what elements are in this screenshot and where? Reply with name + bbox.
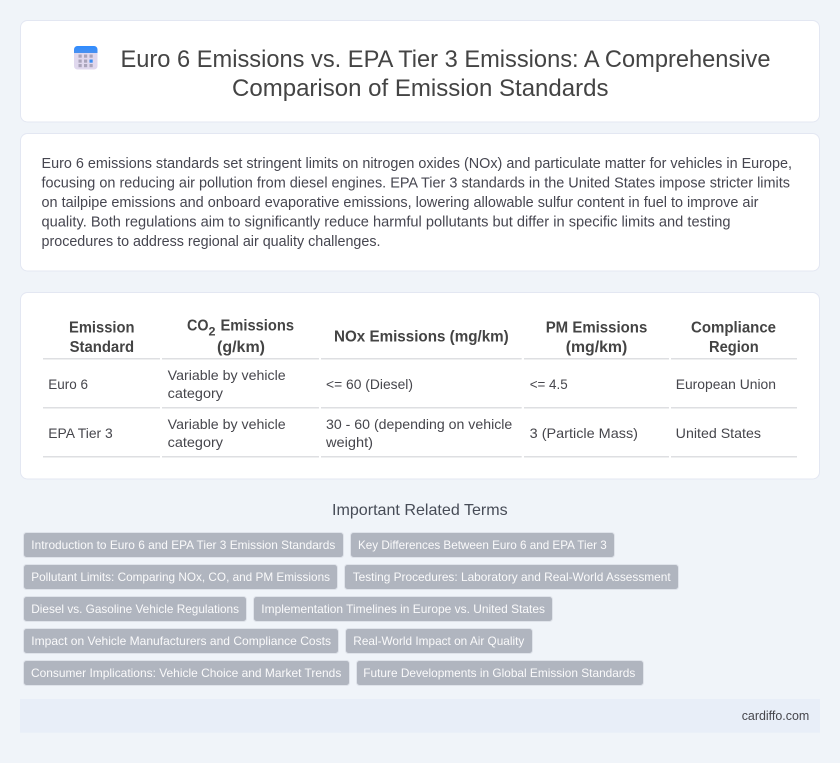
footer xyxy=(20,699,820,733)
intro text: focusing on reducing air pollution from diesel engines. EPA Tier 3 standards in the United States impose stricter limits xyxy=(42,176,790,192)
table row: Euro 6: European Union xyxy=(676,376,776,392)
header: emission standard xyxy=(69,320,134,356)
heading: important related terms: Important Related Terms xyxy=(332,502,508,519)
intro text: on tailpipe emissions and onboard evaporative emissions, lowering allowable sulfur content in fuel to improve air xyxy=(42,195,759,211)
tag: Testing Procedures: Laboratory and Real-World Assessment xyxy=(353,570,671,584)
panel: comparison table xyxy=(20,292,820,479)
header: compliance region: Compliance xyxy=(691,320,776,337)
header: CO2 emissions: Emissions xyxy=(220,318,294,335)
tag: Real-World Impact on Air Quality xyxy=(353,634,524,648)
table row: EPA Tier 3: United States xyxy=(676,425,761,441)
panel: introduction xyxy=(20,134,820,271)
table row: Euro 6 xyxy=(48,367,776,401)
table row: EPA Tier 3: Variable by vehicle xyxy=(168,416,286,432)
tag xyxy=(344,564,678,590)
table row: Euro 6: Variable by vehicle xyxy=(168,367,286,383)
header: emission standard: Standard xyxy=(70,339,134,356)
header: compliance region: Region xyxy=(709,339,759,356)
table row: EPA Tier 3: 3 (Particle Mass) xyxy=(530,425,638,441)
table row: EPA Tier 3: EPA Tier 3 xyxy=(48,425,113,441)
tag xyxy=(356,660,644,686)
header: emission standard: Emission xyxy=(69,320,134,337)
table row: Euro 6: Euro 6 xyxy=(48,376,88,392)
header: CO2 emissions: (g/km) xyxy=(217,339,265,356)
tag: Future Developments in Global Emission Standards xyxy=(363,666,635,680)
tag: Impact on Vehicle Manufacturers and Compliance Costs xyxy=(31,634,331,648)
tag: Pollutant Limits: Comparing NOx, CO, and PM Emissions xyxy=(31,570,330,584)
header: PM emissions: PM Emissions xyxy=(546,320,647,337)
header: CO2 emissions xyxy=(187,318,294,356)
table row: Euro 6: category xyxy=(168,385,223,401)
tag xyxy=(350,532,614,558)
intro text: quality. Both regulations aim to significantly reduce harmful pollutants but differ in specific limits and testing xyxy=(42,215,730,231)
tag xyxy=(24,596,246,622)
header: CO2 emissions: CO xyxy=(187,318,208,335)
table header row xyxy=(69,318,776,356)
table row: Euro 6: <= 4.5 xyxy=(530,376,568,392)
tag xyxy=(254,596,552,622)
table row: EPA Tier 3: 30 - 60 (depending on vehicle xyxy=(326,416,513,432)
tag xyxy=(24,628,338,654)
header: NOx emissions: NOx Emissions (mg/km) xyxy=(334,329,509,346)
tag xyxy=(346,628,532,654)
intro text xyxy=(42,156,792,250)
tag xyxy=(24,660,350,686)
title: Euro 6 Emissions vs. EPA Tier 3 Emissions: A Comprehensive xyxy=(120,46,770,73)
title xyxy=(120,46,770,102)
table row: EPA Tier 3: weight) xyxy=(325,434,373,450)
icon: calendar xyxy=(74,46,98,70)
intro text: procedures to address regional air quality challenges. xyxy=(42,234,380,250)
header: compliance region xyxy=(691,320,776,356)
tag: Implementation Timelines in Europe vs. United States xyxy=(261,602,545,616)
tag: Diesel vs. Gasoline Vehicle Regulations xyxy=(31,602,239,616)
related terms tags xyxy=(24,532,678,686)
table row: EPA Tier 3 xyxy=(48,416,761,450)
table row: EPA Tier 3: category xyxy=(168,434,223,450)
tag xyxy=(24,564,338,590)
header: CO2 emissions: 2 xyxy=(208,326,216,338)
tag: Consumer Implications: Vehicle Choice and Market Trends xyxy=(31,666,341,680)
footer credit: cardiffo.com xyxy=(742,709,809,723)
title: Comparison of Emission Standards xyxy=(232,75,608,102)
tag: Key Differences Between Euro 6 and EPA Tier 3 xyxy=(358,538,607,552)
header: PM emissions xyxy=(546,320,647,356)
header: PM emissions: (mg/km) xyxy=(566,339,627,356)
tag: Introduction to Euro 6 and EPA Tier 3 Emission Standards xyxy=(31,538,335,552)
table row: Euro 6: <= 60 (Diesel) xyxy=(326,376,413,392)
intro text: Euro 6 emissions standards set stringent limits on nitrogen oxides (NOx) and particulate matter for vehicles in Europe, xyxy=(42,156,792,172)
panel: title header xyxy=(20,20,820,122)
tag xyxy=(24,532,344,558)
